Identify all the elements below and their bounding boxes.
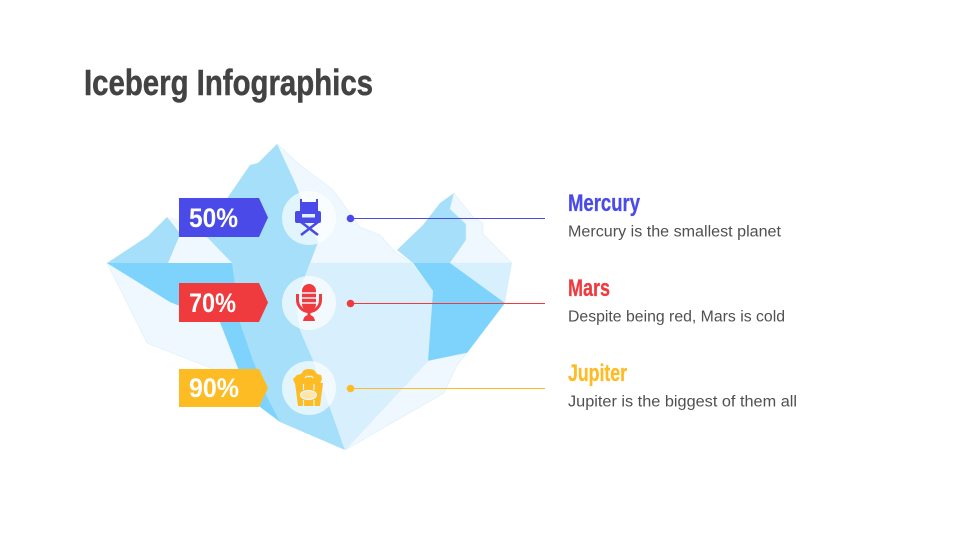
connector line	[350, 302, 545, 304]
row: Jupiter	[179, 360, 797, 415]
iceberg: bottom right light face	[345, 353, 467, 450]
heading: Mars: Mars	[568, 275, 610, 302]
connector dot	[347, 215, 354, 222]
icon circle	[282, 191, 336, 245]
connector dot	[347, 300, 354, 307]
row: Mars	[179, 275, 785, 330]
icon: popcorn bucket	[293, 369, 323, 406]
iceberg: right peak blue face	[397, 193, 466, 263]
connector dot	[347, 385, 354, 392]
iceberg: right peak light face	[450, 193, 512, 263]
description: Despite being red, Mars is cold	[568, 308, 785, 326]
iceberg: right submerged pale face	[450, 263, 512, 303]
heading: Jupiter: Jupiter	[568, 360, 627, 387]
value: 90%: 90%	[189, 373, 239, 403]
iceberg: left peak light face	[167, 217, 232, 263]
heading: Mercury: Mercury	[568, 190, 641, 217]
iceberg: right dark face	[413, 263, 505, 361]
iceberg: main peak light face	[277, 144, 412, 263]
icon circle	[282, 276, 336, 330]
iceberg: left peak blue face	[107, 217, 179, 263]
tab: 50%	[179, 198, 268, 237]
value: 50%: 50%	[189, 203, 238, 233]
connector line	[350, 218, 545, 220]
description: Mercury is the smallest planet	[568, 224, 782, 240]
iceberg illustration	[107, 144, 512, 450]
iceberg: lower left pale face	[107, 263, 238, 369]
connector line	[350, 388, 545, 390]
description: Jupiter is the biggest of them all	[568, 394, 797, 410]
title: Iceberg Infographics	[84, 62, 373, 103]
row: Mercury	[179, 190, 782, 245]
icon circle	[282, 361, 336, 415]
iceberg: centre submerged face	[296, 263, 433, 450]
value: 70%: 70%	[189, 288, 236, 318]
iceberg: left waterline dark face	[107, 263, 280, 422]
iceberg: main blue face	[205, 144, 345, 450]
tab: 70%	[179, 283, 268, 322]
icon: director chair	[295, 199, 321, 235]
tab: 90%	[179, 369, 268, 407]
icon: microphone	[298, 284, 320, 321]
